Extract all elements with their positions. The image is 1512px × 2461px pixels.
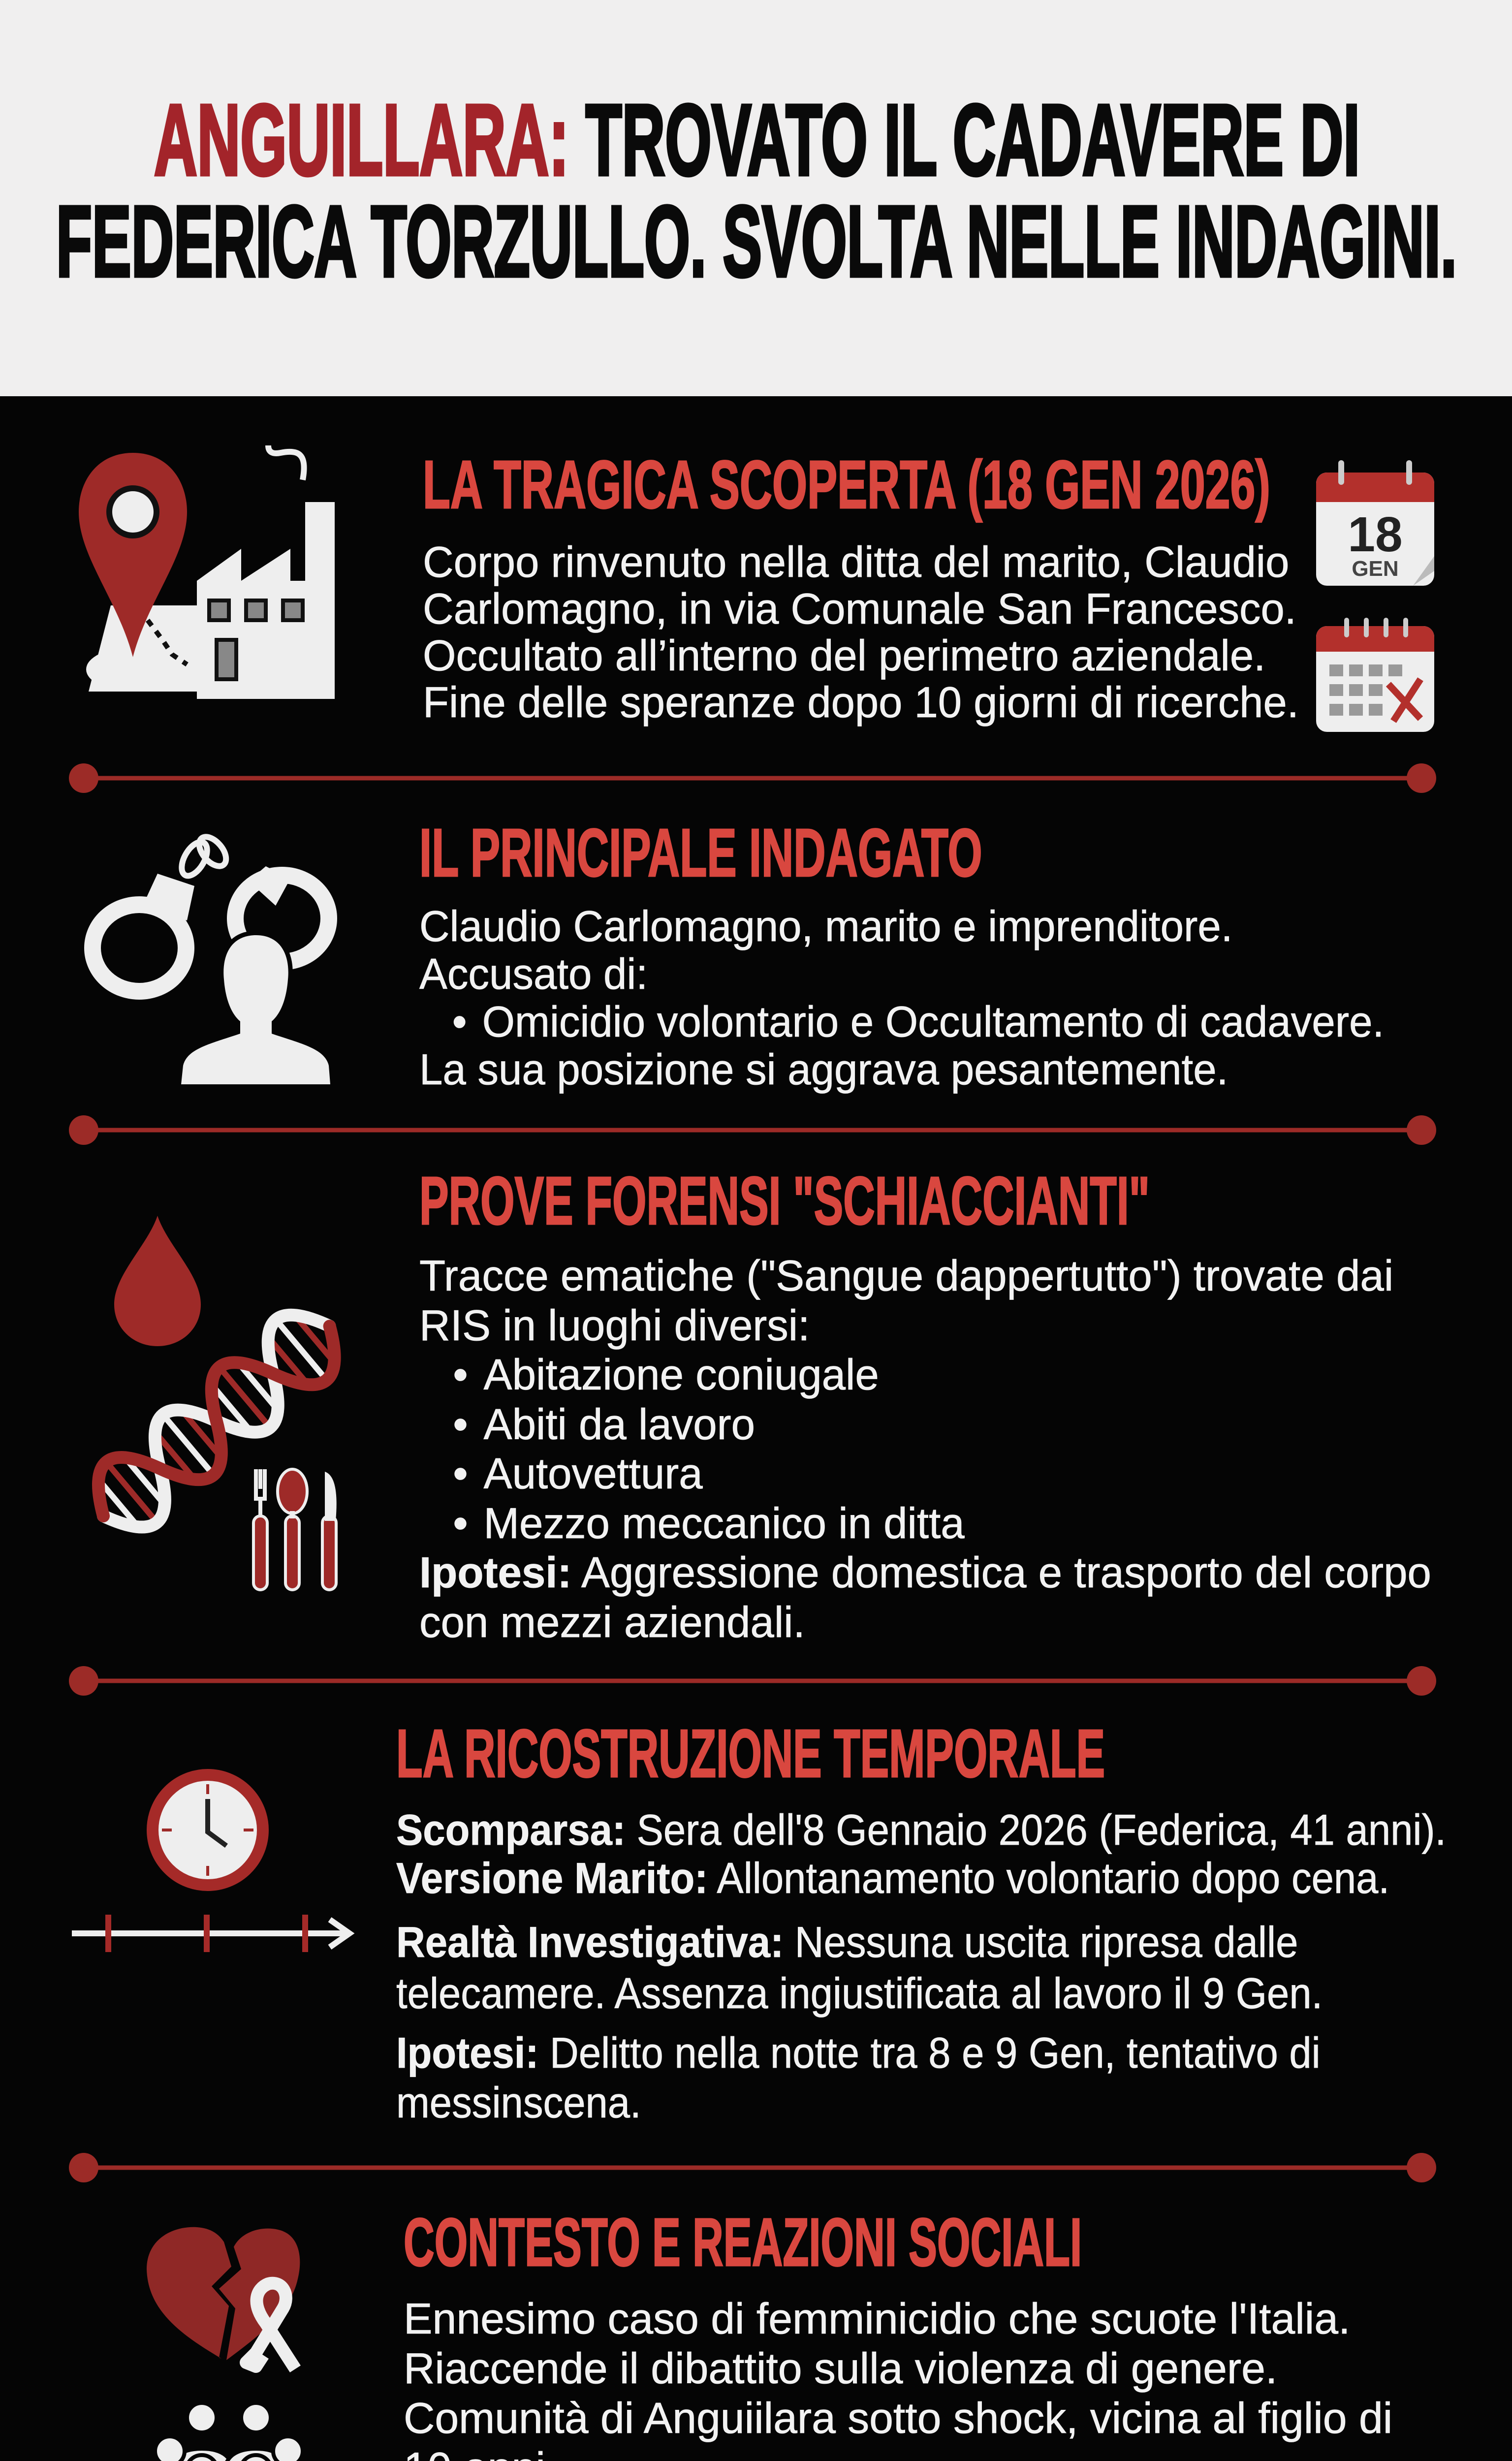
text: scoperta: Occultato all’interno del perimetro aziendale.	[423, 631, 1265, 680]
icon: calendar 18 gen: GEN	[1352, 557, 1399, 581]
divider 3	[69, 1666, 1436, 1696]
header band	[0, 0, 1512, 396]
text: prove	[419, 1251, 1431, 1646]
heading: prove forensi: PROVE FORENSI "SCHIACCIANTI"	[419, 1163, 1150, 1239]
text: scoperta: Carlomagno, in via Comunale San Francesco.	[423, 584, 1296, 633]
text: realtà investigativa: telecamere. Assenza ingiustificata al lavoro il 9 Gen.	[396, 1969, 1323, 2018]
icon: location pin and factory	[79, 445, 335, 699]
icon: broken heart, ribbon, community	[147, 2227, 301, 2461]
divider 1	[69, 763, 1436, 793]
icon: calendar 18 gen	[1316, 460, 1434, 586]
icon: calendar 18 gen: 18	[1348, 507, 1403, 562]
text: prove: •	[453, 1498, 468, 1547]
text: prove: RIS in luoghi diversi:	[419, 1300, 810, 1350]
heading: principale indagato: IL PRINCIPALE INDAGATO	[419, 815, 982, 891]
text: prove: Abitazione coniugale	[484, 1350, 879, 1399]
text: prove: •	[453, 1350, 468, 1399]
text: indagato	[419, 902, 1384, 1094]
text: indagato: •	[452, 997, 467, 1046]
text: versione marito: Versione Marito: Allontanamento volontario dopo cena.	[396, 1854, 1389, 1902]
divider 4	[69, 2153, 1436, 2182]
text: prove: Autovettura	[484, 1449, 703, 1498]
text: indagato: Claudio Carlomagno, marito e imprenditore.	[419, 902, 1232, 950]
text: scoperta: Corpo rinvenuto nella ditta del marito, Claudio	[423, 537, 1289, 586]
text: ipotesi: Ipotesi: Delitto nella notte tra 8 e 9 Gen, tentativo di	[396, 2028, 1321, 2077]
text: contesto: Riaccende il dibattito sulla violenza di genere.	[404, 2344, 1277, 2393]
text: prove: Abiti da lavoro	[484, 1400, 755, 1448]
text: indagato: Accusato di:	[419, 949, 648, 998]
heading: contesto e reazioni: CONTESTO E REAZIONI SOCIALI	[404, 2205, 1082, 2280]
text: ipotesi: messinscena.	[396, 2078, 641, 2127]
heading: ricostruzione temporale: LA RICOSTRUZIONE TEMPORALE	[396, 1716, 1105, 1792]
text: realtà investigativa	[396, 1918, 1323, 2018]
divider 2	[69, 1115, 1436, 1145]
text: scomparsa: Scomparsa: Sera dell'8 Gennaio 2026 (Federica, 41 anni).	[396, 1805, 1446, 1854]
icon: blood drop, dna, utensils	[92, 1216, 341, 1591]
text: prove: •	[453, 1400, 468, 1448]
text: scoperta: Fine delle speranze dopo 10 giorni di ricerche.	[423, 678, 1299, 726]
heading: la tragica scoperta: LA TRAGICA SCOPERTA (18 GEN 2026)	[423, 447, 1270, 523]
text: prove: Mezzo meccanico in ditta	[484, 1498, 965, 1547]
text: indagato: La sua posizione si aggrava pesantemente.	[419, 1045, 1228, 1094]
text: indagato: Omicidio volontario e Occultamento di cadavere.	[482, 997, 1384, 1046]
text: realtà investigativa: Realtà Investigativa: Nessuna uscita ripresa dalle	[396, 1918, 1298, 1966]
title line 2: FEDERICA TORZULLO. SVOLTA NELLE INDAGINI.	[56, 185, 1457, 298]
text: prove: con mezzi aziendali.	[419, 1598, 805, 1646]
text: prove: Tracce ematiche ("Sangue dappertutto") trovate dai	[419, 1251, 1393, 1300]
text: scoperta	[423, 537, 1299, 726]
icon: handcuffs and suspect	[84, 834, 337, 1084]
title line 1: ANGUILLARA: TROVATO IL CADAVERE DI	[154, 84, 1360, 196]
text: prove: Ipotesi: Aggressione domestica e trasporto del corpo	[419, 1548, 1431, 1597]
text: contesto: Ennesimo caso di femminicidio che scuote l'Italia.	[404, 2294, 1350, 2343]
text: contesto	[404, 2294, 1392, 2461]
text: prove: •	[453, 1449, 468, 1498]
text: ipotesi	[396, 2028, 1321, 2127]
icon: calendar with x	[1316, 618, 1434, 732]
text: contesto: Comunità di Anguiilara sotto shock, vicina al figlio di	[404, 2394, 1392, 2442]
icon: clock and timeline	[72, 1769, 354, 1952]
